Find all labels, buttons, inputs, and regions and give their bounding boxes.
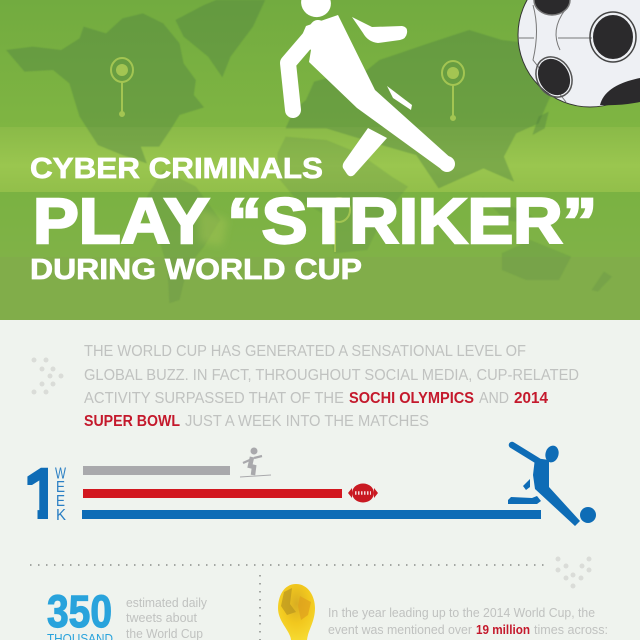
text block: daily tweets: tweets about [126,611,198,625]
text block: intro paragraph: 2014 [514,390,548,407]
big number 1: 1 [24,455,64,535]
title: during world cup: DURING WORLD CUP [30,254,362,286]
label: week vertical: K [56,507,66,524]
icon: right map pin [442,61,464,120]
text block: 19 million mentions: In the year leading up to the 2014 World Cup, the [328,606,595,620]
divider: vertical dots [259,575,261,640]
text block: 19 million mentions: event was mentioned over [328,623,472,637]
panel: hero header [0,0,640,320]
icon: blue soccer player [508,444,596,526]
label: week vertical: E [56,479,65,496]
icon: left map pin [111,58,133,116]
text block: intro paragraph: SOCHI OLYMPICS [349,390,474,407]
stat: 350 thousand: 350 [47,586,112,637]
panel: content background [0,320,640,640]
text block: intro paragraph: GLOBAL BUZZ. IN FACT, THROUGHOUT SOCIAL MEDIA, CUP-RELATED [84,367,579,384]
text block: intro paragraph [84,343,579,430]
text block: 19 million mentions: times across: [534,623,608,637]
text block: daily tweets [126,596,208,640]
world map [6,0,612,303]
icon: white striker figure [288,0,455,176]
text block: intro paragraph: SUPER BOWL [84,413,180,430]
decorative dots left [32,358,64,394]
icon: world cup trophy [278,584,315,640]
text block: intro paragraph: ACTIVITY SURPASSED THAT OF THE [84,390,344,407]
label: week vertical: E [56,493,65,510]
region: brazil highlight [198,208,228,246]
icon: soccer ball [518,0,640,107]
icon: south america map pin [328,198,350,252]
decorative dots right [556,556,592,588]
divider: horizontal dots [30,564,545,566]
title: play striker: PLAY “STRIKER” [33,185,597,257]
bar: world cup [82,510,541,519]
text block: intro paragraph: JUST A WEEK INTO THE MATCHES [185,413,429,430]
label: week vertical: W [55,466,67,482]
bar: super bowl [83,489,342,498]
text block: intro paragraph: THE WORLD CUP HAS GENERATED A SENSATIONAL LEVEL OF [84,343,526,360]
text block: daily tweets: estimated daily [126,596,208,610]
icon: skier [240,448,271,477]
title: cyber criminals: CYBER CRIMINALS [30,153,323,185]
bar: olympics [83,466,230,475]
icon: football [348,484,378,502]
text block: intro paragraph: AND [479,390,509,407]
text block: 19 million mentions: 19 million [476,623,530,637]
label: week vertical [55,466,67,524]
text block: 19 million mentions [328,606,608,637]
